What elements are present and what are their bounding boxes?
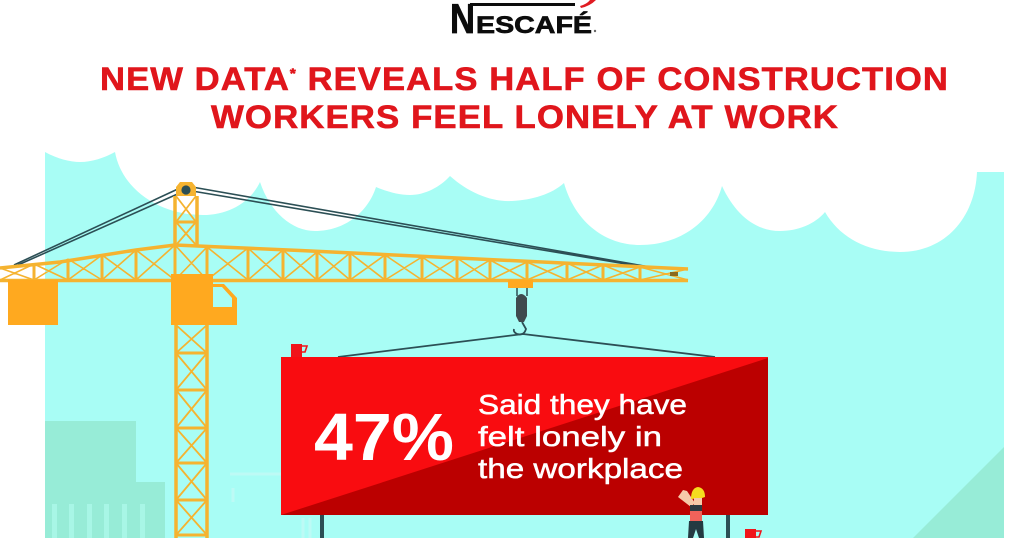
hook	[508, 280, 533, 334]
icon: cup on billboard	[291, 344, 307, 357]
crane cables	[14, 187, 650, 268]
worker	[678, 487, 705, 538]
billboard posts	[320, 515, 730, 538]
title	[100, 61, 949, 135]
crane trusses	[0, 196, 688, 538]
statistic: 47%	[314, 400, 454, 475]
icon: cup on ground	[745, 529, 761, 538]
title: NEW DATA	[100, 61, 276, 97]
faint background crane	[230, 474, 310, 538]
crane cabin	[171, 274, 237, 325]
title: REVEALS HALF OF CONSTRUCTION	[297, 61, 949, 97]
statistic description: the workplace	[478, 453, 683, 484]
logo: ESCAFÉ	[476, 11, 592, 39]
crane jib tip	[670, 272, 678, 276]
logo	[450, 0, 596, 42]
sky with cloud edge	[45, 152, 1004, 538]
background buildings	[45, 421, 1004, 538]
title: WORKERS FEEL LONELY AT WORK	[211, 99, 839, 135]
crane top pulley	[176, 182, 196, 196]
crane	[0, 182, 688, 538]
counterweight	[8, 280, 58, 325]
sling cables	[338, 334, 715, 357]
title: *	[290, 65, 297, 81]
statistic description: felt lonely in	[478, 421, 662, 452]
billboard	[281, 357, 768, 515]
statistic description: Said they have	[478, 389, 687, 420]
statistic description	[478, 389, 687, 484]
